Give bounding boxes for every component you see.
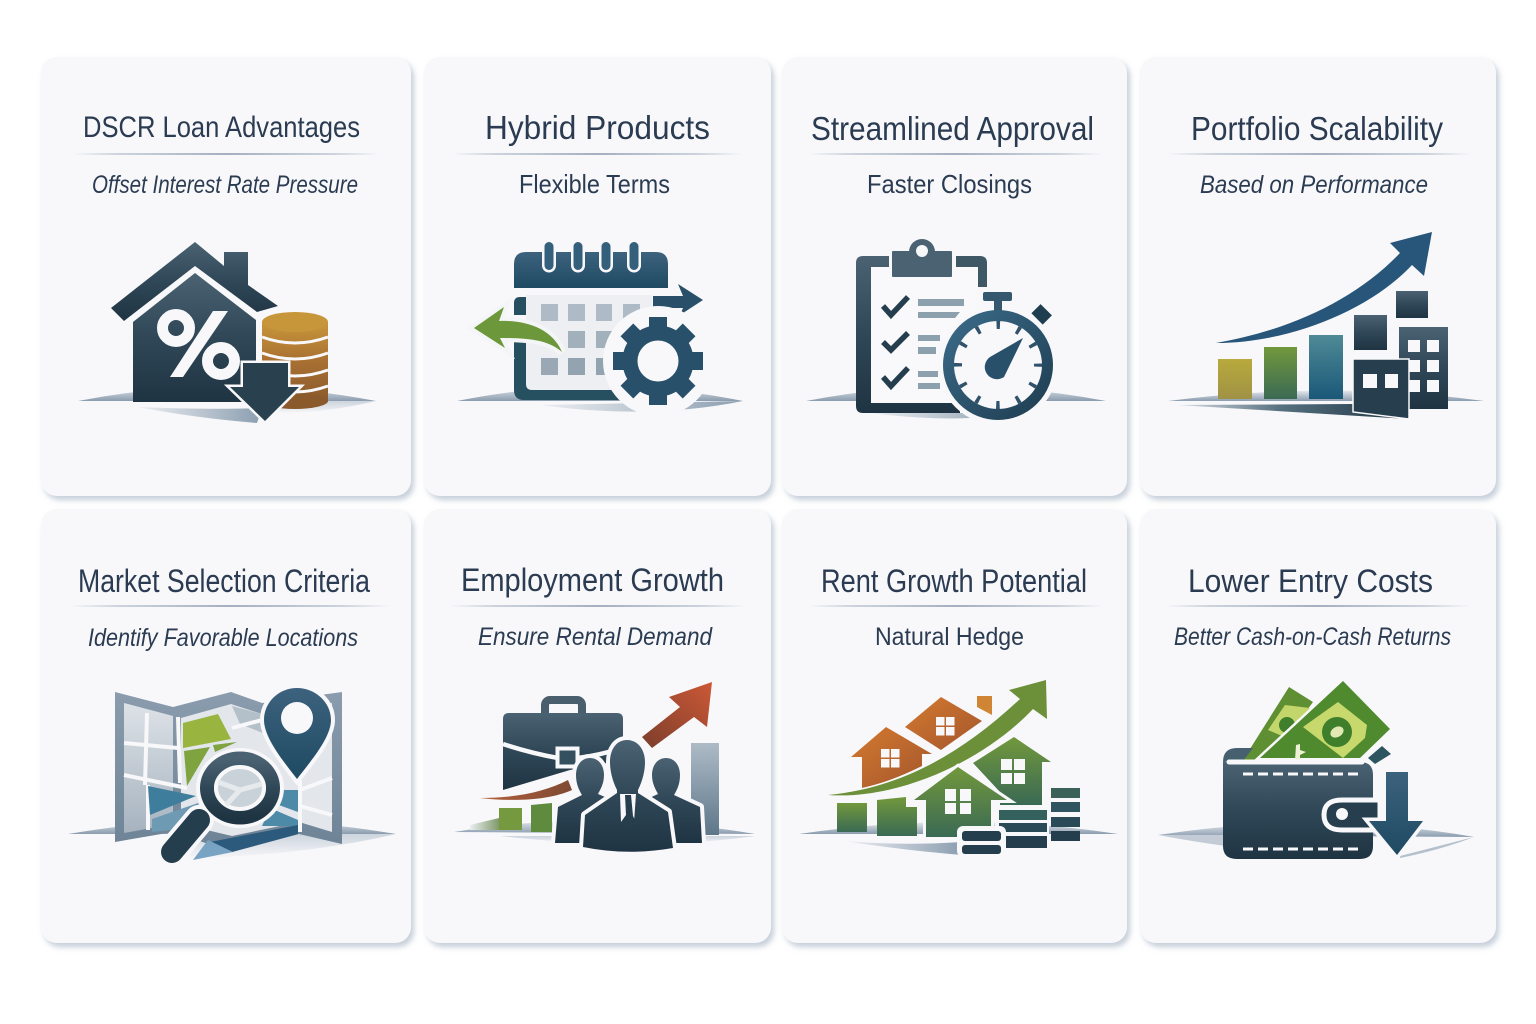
icon: clipboard checklist with stopwatch	[806, 239, 1106, 425]
subheading: Natural Hedge: Natural Hedge	[875, 623, 1024, 651]
subheading: Better Cash-on-Cash Returns: Better Cash-on-Cash Returns	[1174, 623, 1451, 651]
heading: Streamlined Approval: Streamlined Approval	[811, 110, 1094, 147]
subheading: Ensure Rental Demand: Ensure Rental Demand	[478, 623, 713, 651]
heading: Employment Growth: Employment Growth	[461, 562, 724, 598]
subheading: Identify Favorable Locations: Identify Favorable Locations	[88, 624, 358, 652]
subheading: Offset Interest Rate Pressure: Offset Interest Rate Pressure	[92, 171, 358, 199]
heading: Rent Growth Potential: Rent Growth Potential	[821, 563, 1087, 599]
subheading: Faster Closings: Faster Closings	[867, 169, 1032, 199]
icon: wallet with cash and down arrow	[1158, 681, 1474, 859]
subheading: Based on Performance: Based on Performance	[1200, 171, 1428, 199]
icon: calendar with gear and arrows	[457, 242, 743, 416]
team member: left	[555, 758, 612, 843]
heading: Market Selection Criteria: Market Selection Criteria	[78, 563, 370, 599]
team member: center	[583, 740, 673, 852]
panel: Hybrid Products	[424, 57, 771, 496]
team member: right	[645, 758, 702, 843]
panel: Lower Entry Costs	[1140, 509, 1496, 943]
icon: house with percent, coins and down arrow	[78, 242, 376, 423]
icon: growth chart with buildings	[1168, 232, 1484, 419]
heading: Portfolio Scalability: Portfolio Scalability	[1191, 110, 1443, 147]
panel: Streamlined Approval	[782, 57, 1127, 496]
heading: DSCR Loan Advantages: DSCR Loan Advantages	[83, 111, 360, 144]
icon: houses with rising arrow and coin stacks	[799, 680, 1118, 857]
icon: folded map with pin and magnifier	[68, 688, 396, 860]
panel: Portfolio Scalability	[1140, 57, 1496, 496]
heading: Hybrid Products: Hybrid Products	[485, 109, 710, 146]
subheading: Flexible Terms: Flexible Terms	[519, 169, 670, 199]
heading: Lower Entry Costs: Lower Entry Costs	[1188, 563, 1433, 599]
icon: briefcase, team and growth arrow	[454, 682, 755, 852]
panel: Employment Growth	[424, 509, 771, 943]
panel: Market Selection Criteria	[41, 509, 411, 943]
panel: DSCR Loan Advantages	[41, 57, 411, 496]
panel: Rent Growth Potential	[782, 509, 1127, 943]
